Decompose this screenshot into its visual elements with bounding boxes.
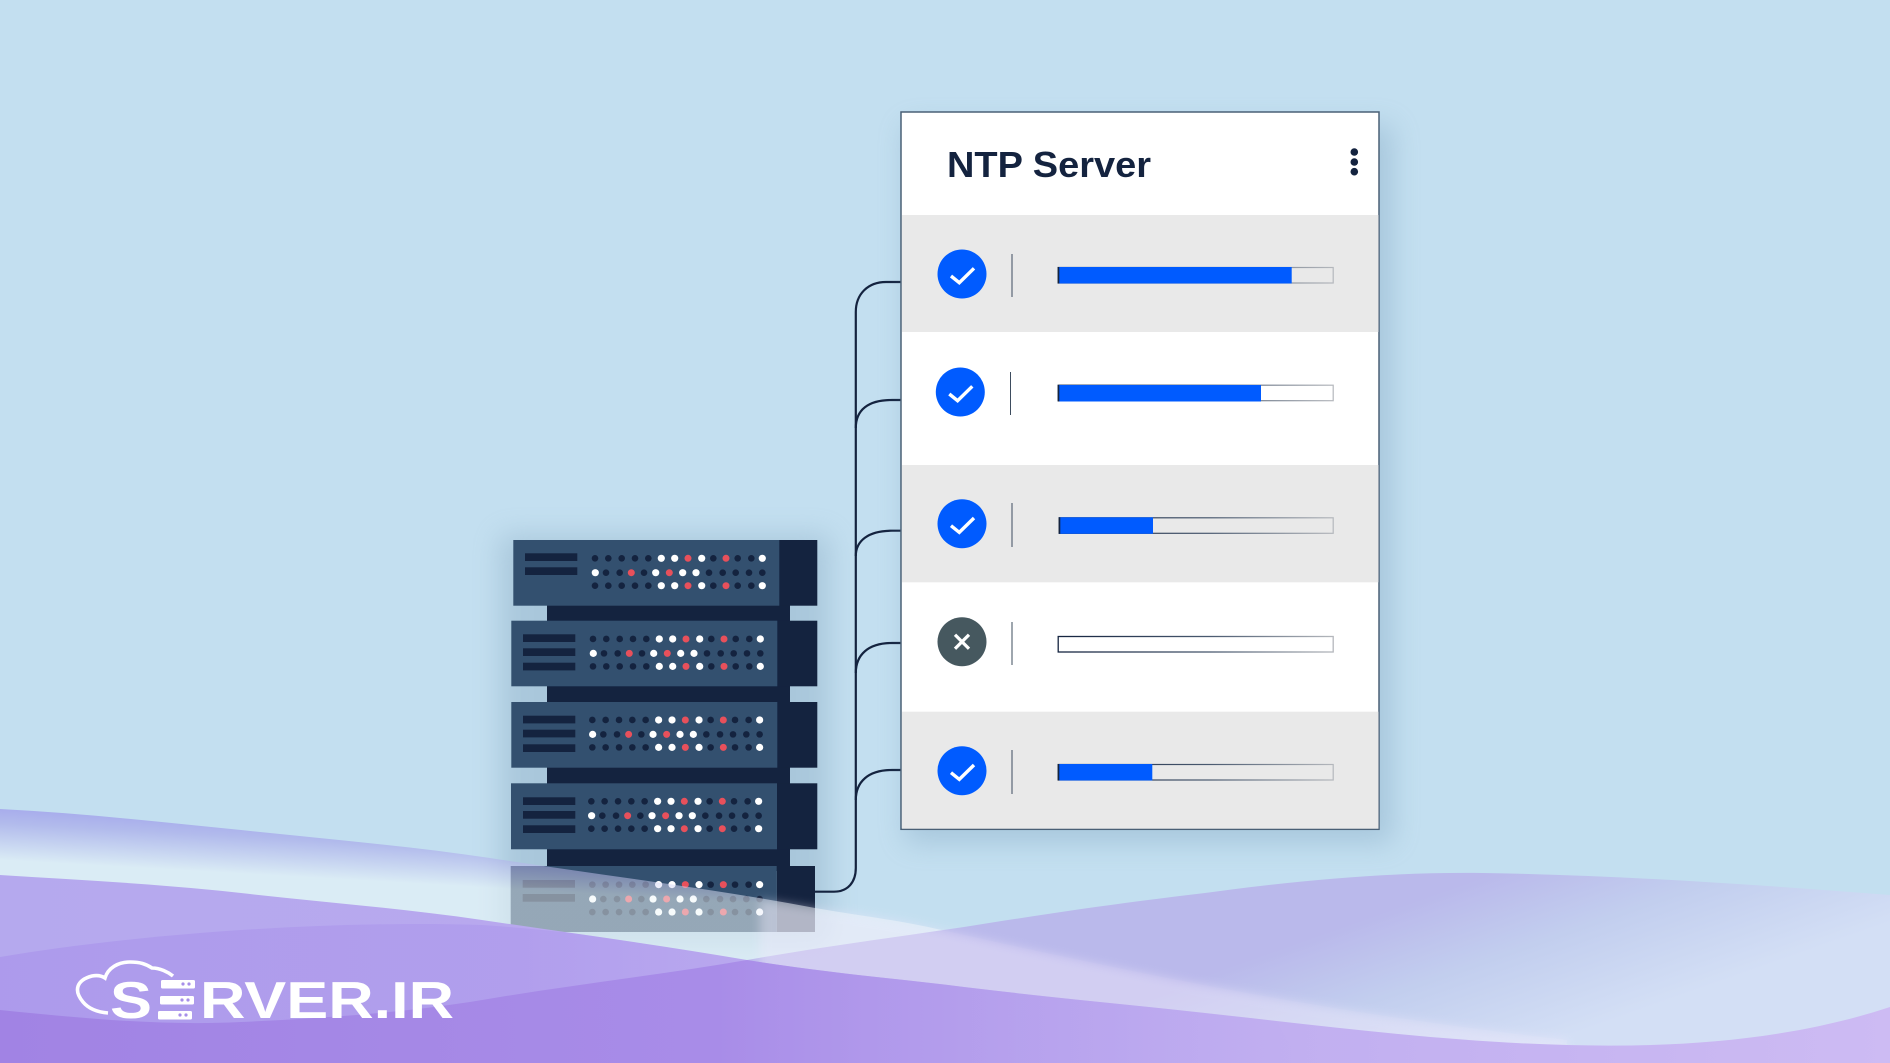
wave: purple foreground bbox=[0, 875, 1890, 1063]
server rack bbox=[500, 535, 830, 945]
icon: menu dots bbox=[1350, 148, 1358, 176]
wave: pale band across hill bbox=[760, 900, 1567, 1055]
wave: right hill bbox=[0, 873, 1890, 1063]
wave: mid overlap bbox=[0, 924, 1040, 1063]
logo wordmark: RVER.IR bbox=[200, 972, 454, 1030]
server unit 2 bbox=[511, 621, 817, 686]
row 4 status bbox=[938, 617, 1333, 666]
connection lines bbox=[814, 282, 901, 892]
logo letter S: S bbox=[110, 972, 152, 1030]
server unit 3 bbox=[511, 702, 817, 768]
row 5 status bbox=[938, 746, 1333, 795]
logo server icon bbox=[158, 980, 195, 1020]
rack connectors bbox=[547, 600, 790, 871]
server unit 5 bbox=[511, 866, 815, 932]
wave: back band bbox=[0, 809, 1567, 1063]
panel shadow bbox=[905, 125, 1393, 843]
row backgrounds bbox=[902, 215, 1378, 829]
row 2 status bbox=[936, 368, 1333, 416]
logo cloud outline bbox=[77, 962, 173, 1013]
logo: SERVER.IR bbox=[77, 962, 454, 1030]
server unit 4 bbox=[511, 783, 817, 849]
row 1 status bbox=[938, 250, 1333, 298]
heading: NTP Server bbox=[947, 144, 1151, 185]
server unit 1 bbox=[513, 540, 817, 606]
row 3 status bbox=[938, 499, 1333, 548]
panel: NTP Server bbox=[901, 112, 1379, 829]
